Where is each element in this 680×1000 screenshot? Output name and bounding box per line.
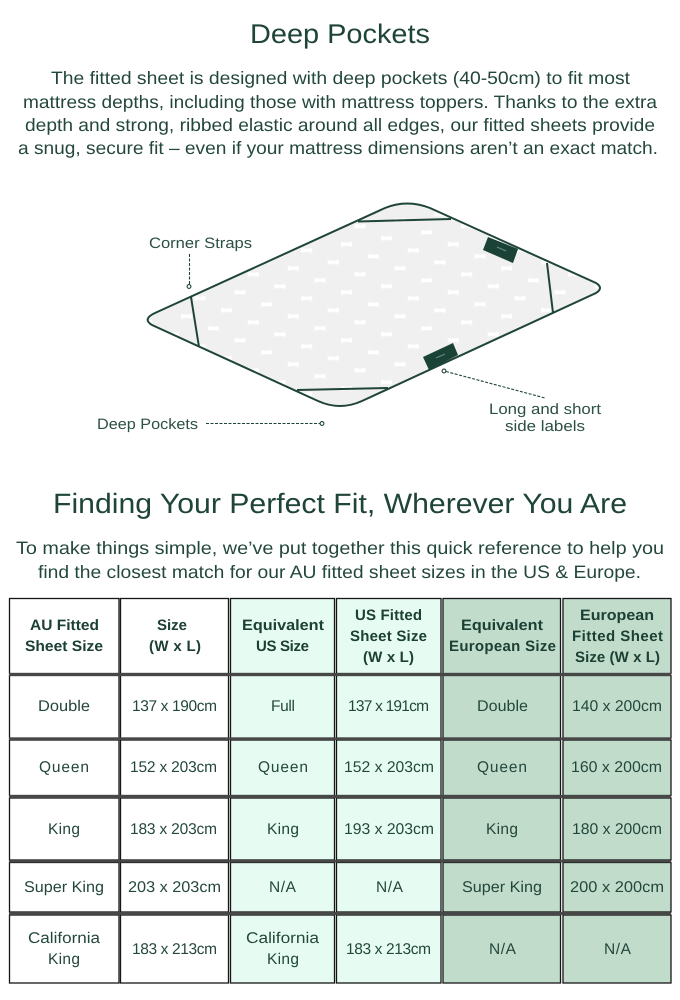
intro paragraph: a snug, secure fit – even if your mattress dimensions aren’t an exact match. bbox=[18, 138, 658, 158]
row: Queen: Queen bbox=[258, 759, 308, 776]
row: Super King: N/A bbox=[376, 879, 404, 896]
row: Super King: 203 x 203cm bbox=[128, 879, 221, 896]
header row: US Size bbox=[256, 638, 309, 655]
callout: long and short side labels: side labels bbox=[505, 418, 585, 435]
row: California King: King bbox=[267, 951, 299, 968]
row: Super King: Super King bbox=[24, 879, 104, 896]
header row: Fitted Sheet bbox=[572, 628, 663, 645]
callout: long and short side labels: Long and short bbox=[489, 401, 602, 418]
diagram: fitted sheet bbox=[148, 204, 600, 406]
long side label bbox=[423, 343, 458, 370]
row: King: 183 x 203cm bbox=[130, 821, 217, 838]
row: Super King: 200 x 200cm bbox=[570, 879, 664, 896]
header row: US Fitted bbox=[355, 607, 422, 624]
row separators bbox=[9, 673, 671, 915]
size guide intro: To make things simple, we’ve put together this quick reference to help you bbox=[16, 538, 664, 558]
callout: corner straps bbox=[149, 235, 252, 288]
row: Double bbox=[38, 698, 662, 715]
header row: European Size bbox=[449, 638, 556, 655]
row: Queen: 152 x 203cm bbox=[130, 759, 217, 776]
corner straps bbox=[191, 219, 553, 390]
row: California King: 183 x 213cm bbox=[346, 941, 431, 958]
row: Double: 137 x 191cm bbox=[348, 698, 429, 715]
row: California King: California bbox=[28, 930, 100, 947]
row: Queen bbox=[39, 759, 662, 776]
row: King: 193 x 203cm bbox=[344, 821, 434, 838]
row: Double: Double bbox=[38, 698, 90, 715]
sheet pattern bbox=[148, 204, 600, 406]
intro paragraph: depth and strong, ribbed elastic around all edges, our fitted sheets provide bbox=[25, 115, 655, 135]
sheet fill bbox=[148, 204, 600, 406]
heading: Finding Your Perfect Fit: Finding Your Perfect Fit, Wherever You Are bbox=[53, 488, 627, 519]
row: King: 180 x 200cm bbox=[572, 821, 662, 838]
row: California King: N/A bbox=[604, 941, 632, 958]
callout: corner straps: Corner Straps bbox=[149, 235, 252, 252]
row: Double: Full bbox=[271, 698, 295, 715]
header row: Sheet Size bbox=[350, 628, 427, 645]
row: Double: 137 x 190cm bbox=[132, 698, 217, 715]
header row: Equivalent bbox=[242, 617, 324, 634]
header row: Size bbox=[157, 617, 187, 634]
callout: deep pockets: Deep Pockets bbox=[97, 416, 198, 433]
intro paragraph bbox=[18, 68, 658, 158]
size guide intro bbox=[16, 538, 664, 582]
table grid bbox=[10, 598, 671, 983]
header row: Size (W x L) bbox=[575, 649, 660, 666]
row: Super King: Super King bbox=[462, 879, 542, 896]
row: California King: California bbox=[246, 930, 319, 947]
row: Super King: N/A bbox=[269, 879, 297, 896]
row: Double: 140 x 200cm bbox=[572, 698, 662, 715]
row: Queen: 152 x 203cm bbox=[344, 759, 434, 776]
header row: European bbox=[580, 607, 654, 624]
row: California King: 183 x 213cm bbox=[132, 941, 217, 958]
header row: Sheet Size bbox=[25, 638, 103, 655]
row: Super King bbox=[24, 879, 664, 896]
intro paragraph: mattress depths, including those with mattress toppers. Thanks to the extra bbox=[23, 92, 658, 112]
callout: deep pockets bbox=[97, 416, 324, 433]
header row: (W x L) bbox=[363, 649, 414, 666]
row: Queen: 160 x 200cm bbox=[571, 759, 662, 776]
header row bbox=[25, 607, 663, 666]
callout: long and short side labels bbox=[442, 369, 602, 435]
row: Double: Double bbox=[477, 698, 528, 715]
row: California King: N/A bbox=[489, 941, 517, 958]
header row: Equivalent bbox=[461, 617, 543, 634]
title: Deep Pockets: Deep Pockets bbox=[250, 19, 430, 49]
sheet outline bbox=[148, 204, 600, 406]
row: King: King bbox=[267, 821, 299, 838]
row: King: King bbox=[48, 821, 80, 838]
intro paragraph: The fitted sheet is designed with deep pockets (40-50cm) to fit most bbox=[51, 68, 630, 88]
row: Queen: Queen bbox=[39, 759, 89, 776]
row: King: King bbox=[486, 821, 518, 838]
size comparison table bbox=[9, 598, 671, 983]
row: Queen: Queen bbox=[477, 759, 527, 776]
header row: (W x L) bbox=[149, 638, 201, 655]
short side label bbox=[483, 237, 518, 263]
header row: AU Fitted bbox=[30, 617, 99, 634]
row: King bbox=[48, 821, 662, 838]
row: California King: King bbox=[48, 951, 80, 968]
size guide intro: find the closest match for our AU fitted sheet sizes in the US & Europe. bbox=[38, 562, 641, 582]
row: California King bbox=[28, 930, 632, 968]
